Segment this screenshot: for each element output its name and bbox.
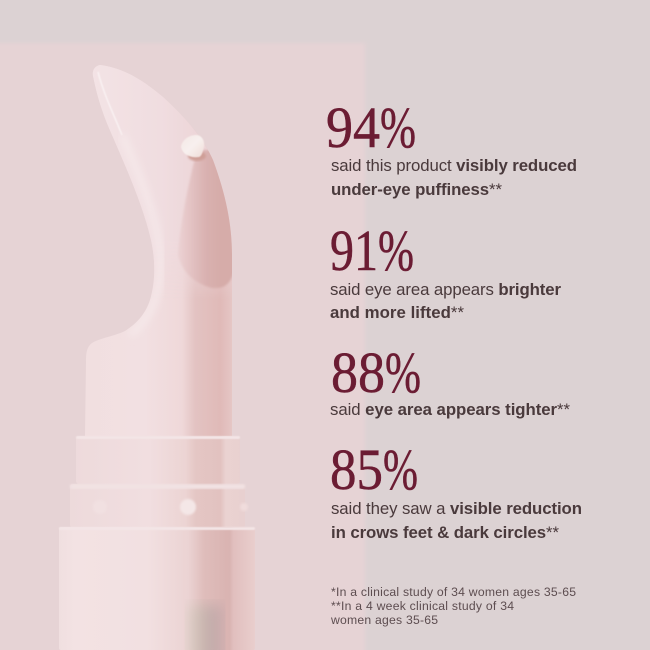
description: said this product visibly reduced bbox=[331, 156, 577, 175]
stat 85% second line: in crows feet & dark circles** bbox=[331, 523, 559, 542]
number 85% bbox=[330, 437, 418, 502]
upper collar bbox=[76, 436, 240, 484]
applicator tip and neck bbox=[85, 60, 240, 436]
stat: 88% bbox=[330, 340, 570, 419]
number 94%: % bbox=[380, 95, 416, 160]
number 88%: 88 bbox=[331, 340, 385, 405]
number 91%: 91 bbox=[330, 218, 378, 283]
stat: 85% bbox=[330, 437, 582, 518]
number 91% bbox=[330, 218, 414, 283]
number 85%: % bbox=[383, 437, 418, 502]
footnotes: women ages 35-65 bbox=[330, 613, 438, 627]
description: said eye area appears brighter bbox=[330, 280, 561, 299]
footnotes bbox=[330, 585, 576, 627]
stat: 94% bbox=[326, 95, 577, 175]
footnotes: **In a 4 week clinical study of 34 bbox=[331, 599, 514, 613]
number 94% bbox=[326, 95, 416, 160]
description: said eye area appears tighter** bbox=[330, 400, 570, 419]
number 91%: % bbox=[378, 218, 414, 283]
footnotes: *In a clinical study of 34 women ages 35-65 bbox=[331, 585, 576, 599]
stat 94% second line: under-eye puffiness** bbox=[331, 180, 502, 199]
number 88% bbox=[331, 340, 421, 405]
tube body bbox=[59, 527, 255, 650]
product: applicator tube bbox=[59, 60, 255, 650]
number 88%: % bbox=[385, 340, 421, 405]
stat: 91% bbox=[330, 218, 561, 299]
description: said they saw a visible reduction bbox=[331, 499, 582, 518]
cream droplet bbox=[181, 135, 206, 161]
stat 91% second line: and more lifted** bbox=[330, 303, 464, 322]
lower collar with dots bbox=[70, 484, 248, 528]
number 94%: 94 bbox=[326, 95, 380, 160]
number 85%: 85 bbox=[330, 437, 383, 502]
